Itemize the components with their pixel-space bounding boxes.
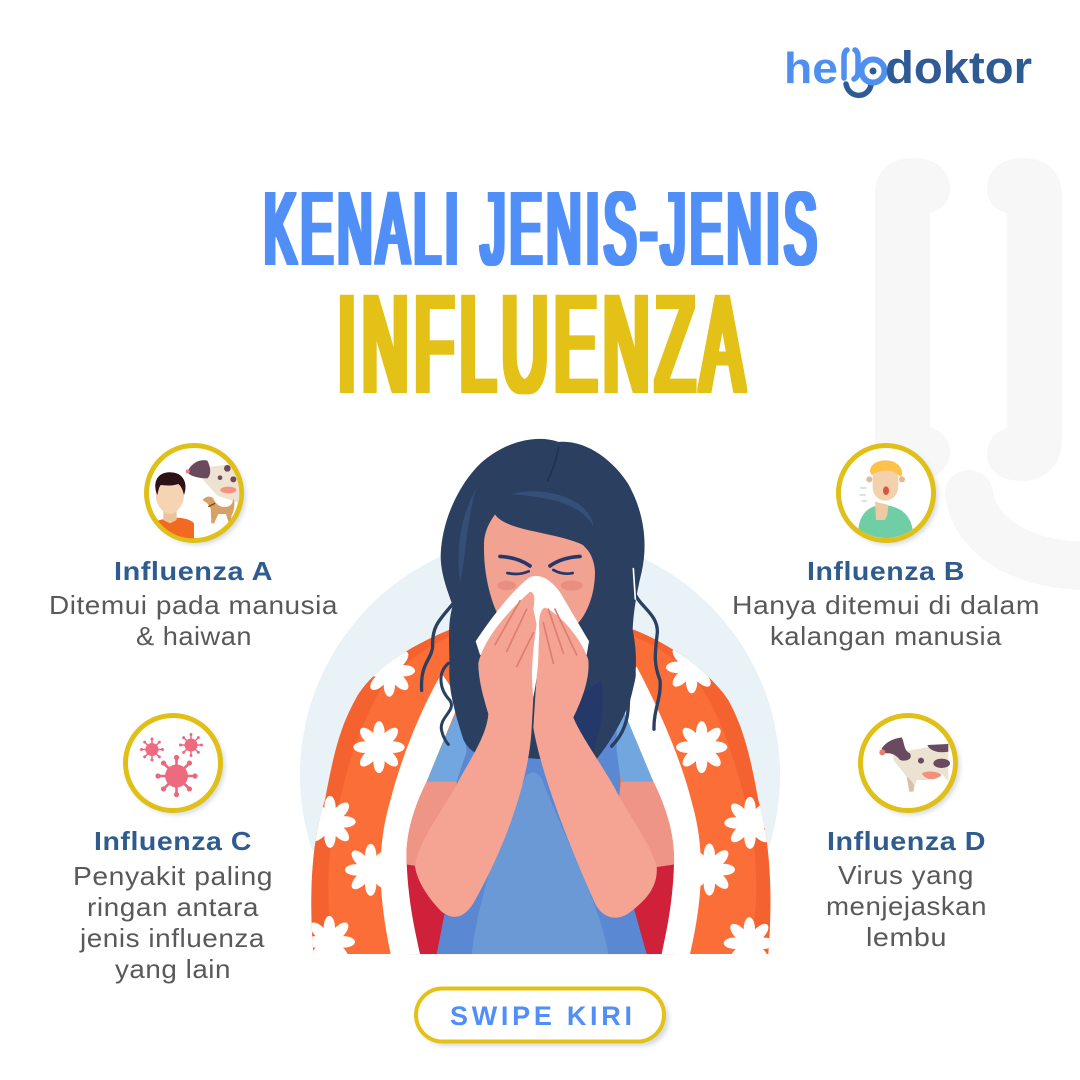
white trim left [381, 673, 460, 954]
background watermark: stethoscope logo [875, 158, 1080, 566]
fringe highlight [512, 491, 593, 526]
upper arms [406, 782, 674, 870]
hair shadow [572, 680, 603, 761]
background circle [300, 535, 780, 850]
description: Penyakit paling [73, 861, 273, 891]
finger lines [495, 601, 577, 667]
face [484, 515, 595, 629]
logo: hellodoktor: he [784, 44, 838, 93]
description: lembu [866, 922, 947, 952]
description [73, 861, 273, 984]
logo: hellodoktor: doktor [885, 42, 1032, 93]
hands and forearms [415, 592, 657, 918]
description [49, 590, 338, 651]
icon: cow [860, 716, 960, 815]
cheeks [497, 580, 583, 591]
description: jenis influenza [79, 923, 265, 953]
logo: hellodoktor [784, 42, 1032, 95]
description: yang lain [115, 954, 231, 984]
description: kalangan manusia [770, 621, 1002, 651]
description: & haiwan [136, 621, 252, 651]
description: Hanya ditemui di dalam [732, 590, 1040, 620]
panel: Influenza B [732, 446, 1040, 651]
hair highlight [459, 487, 477, 582]
description [732, 590, 1040, 651]
hair strands [422, 569, 660, 746]
panel: Influenza D [826, 716, 987, 952]
description: menjejaskan [826, 891, 987, 921]
swipe button: SWIPE KIRI [450, 1001, 632, 1031]
icon: person, cow and dog [146, 446, 246, 545]
fringe [496, 489, 601, 564]
icon: coughing person [838, 446, 938, 545]
panel: Influenza A [49, 446, 338, 651]
description: Virus yang [838, 860, 974, 890]
description [826, 860, 987, 952]
flowers [304, 641, 776, 969]
hair parting [547, 446, 559, 481]
white trim right [617, 667, 701, 954]
panel: Influenza C [73, 716, 273, 984]
tissue [476, 576, 589, 655]
red lining [406, 857, 675, 954]
heading: Influenza B [807, 556, 965, 586]
icon: viruses [126, 716, 225, 815]
heading: Influenza A [114, 556, 273, 586]
palm slit [532, 619, 539, 697]
shirt [427, 694, 653, 954]
hair back [441, 439, 645, 763]
description: ringan antara [87, 892, 259, 922]
description: Ditemui pada manusia [49, 590, 338, 620]
heading: Influenza D [827, 826, 986, 856]
eyes and brows [500, 556, 580, 574]
illustration: sneezing woman with blanket [304, 439, 776, 969]
blanket [304, 629, 776, 969]
heading: Influenza C [94, 826, 252, 856]
swipe button [416, 988, 669, 1046]
